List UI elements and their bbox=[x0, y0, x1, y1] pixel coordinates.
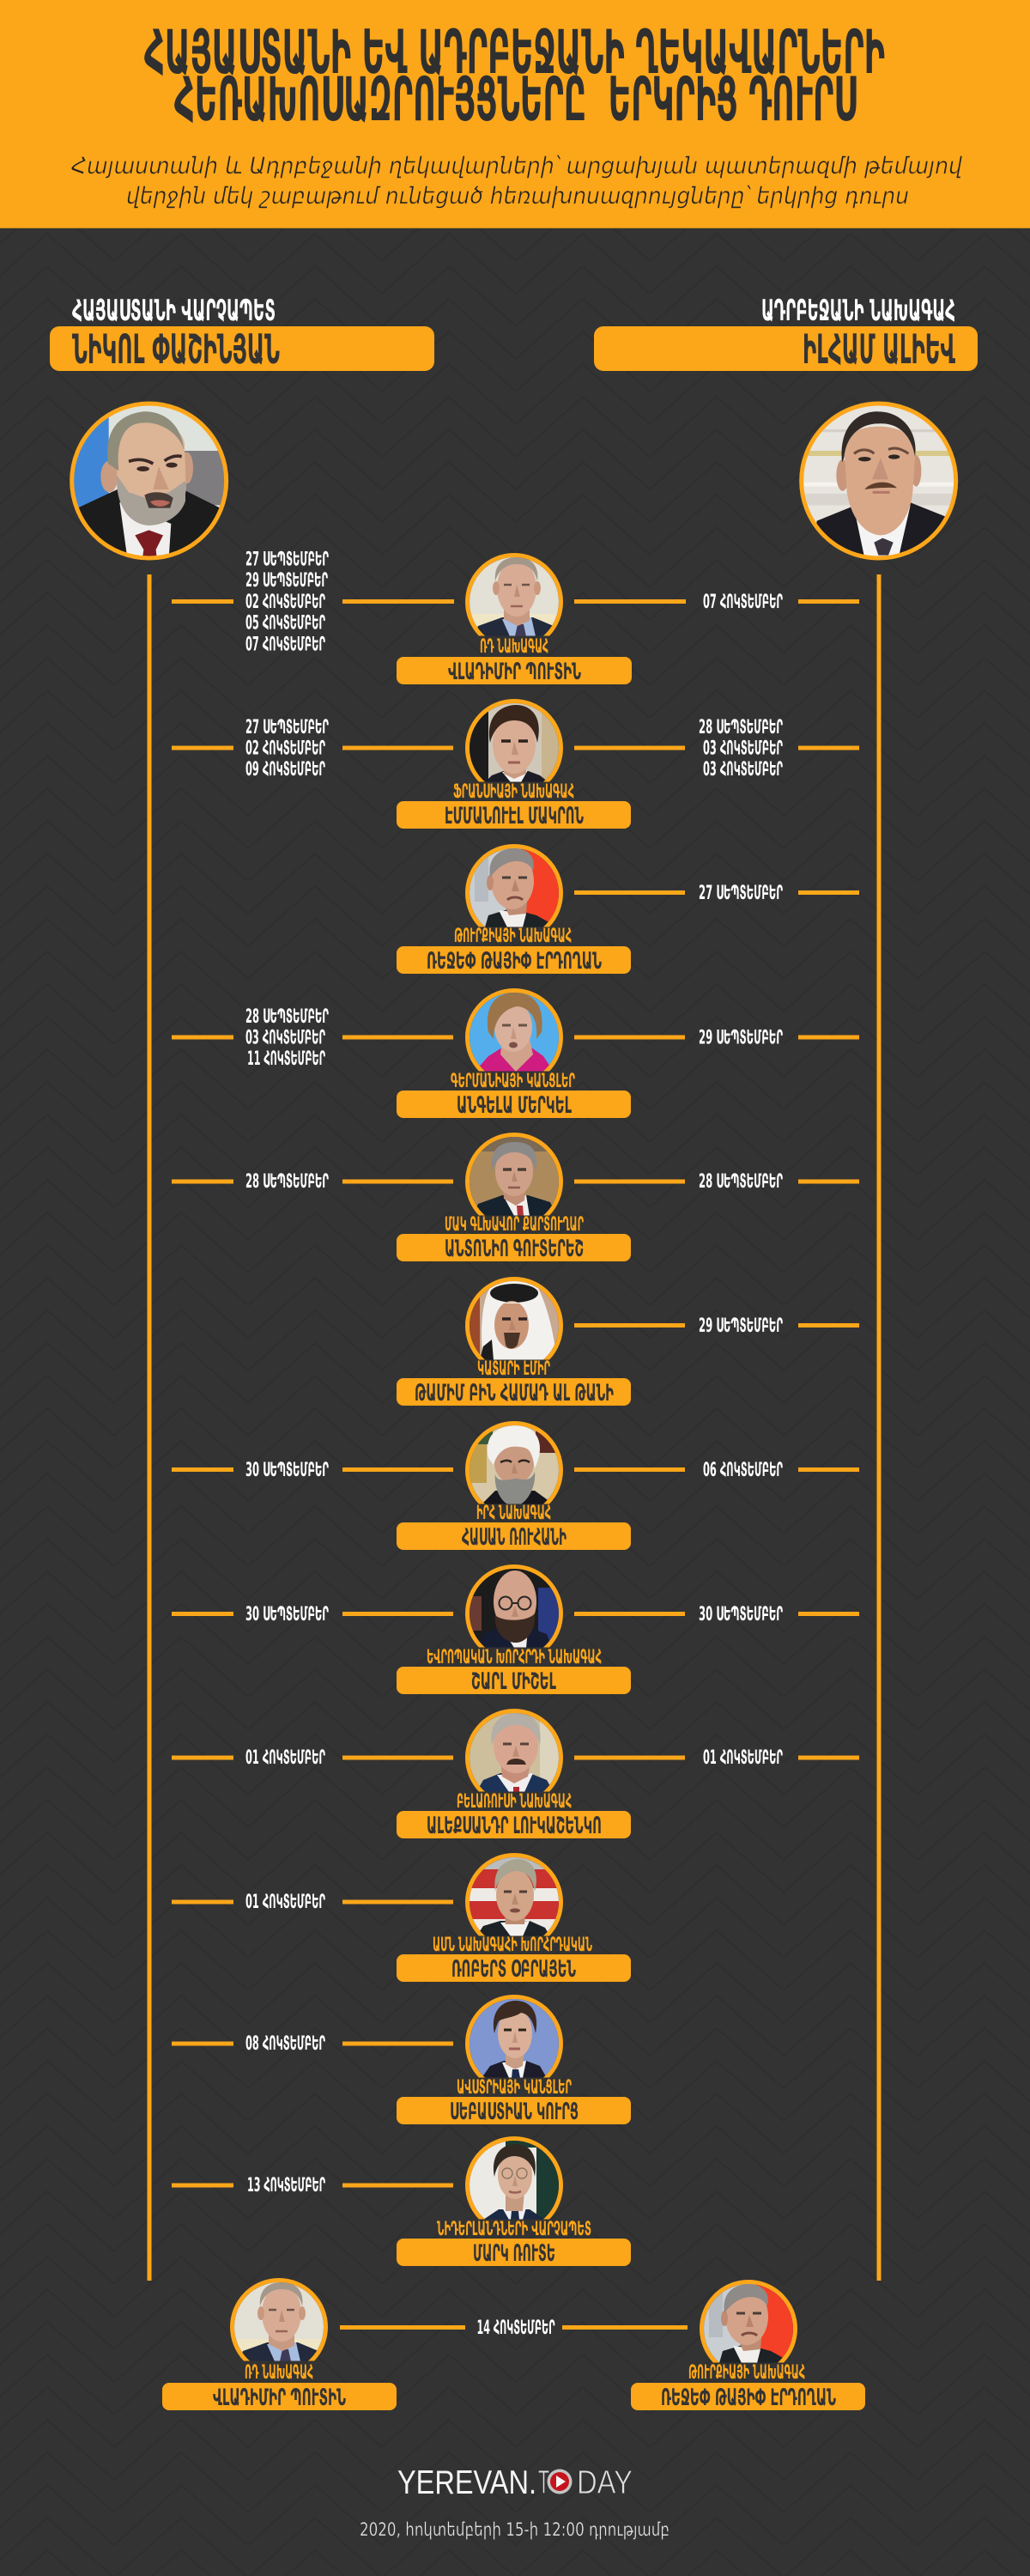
name pill: ՇԱՐԼ ՄԻՇԵԼ bbox=[471, 1668, 556, 1695]
row: Al Thani bbox=[397, 1274, 859, 1406]
portrait: Rutte bbox=[465, 2136, 563, 2219]
footer date note: 2020, հոկտեմբերի 15-ի 12:00 դրությամբ bbox=[360, 2519, 670, 2540]
name pill: Putin: ՎԼԱԴԻՄԻՐ ՊՈՒՏԻՆ bbox=[213, 2385, 346, 2411]
connectors bbox=[172, 2042, 453, 2045]
dates Armenia side bbox=[245, 550, 329, 655]
dates Azerbaijan side: 06 ՀՈԿՏԵՄԲԵՐ bbox=[703, 1460, 783, 1481]
subtitle bbox=[71, 153, 963, 210]
dates Armenia side bbox=[245, 717, 329, 781]
dates Armenia side: 11 ՀՈԿՏԵՄԲԵՐ bbox=[247, 1048, 325, 1070]
row: Erdogan bbox=[397, 841, 859, 975]
row: Macron bbox=[172, 696, 859, 829]
connectors bbox=[172, 745, 859, 750]
dates Armenia side: 09 ՀՈԿՏԵՄԲԵՐ bbox=[245, 759, 325, 781]
dates Armenia side: 03 ՀՈԿՏԵՄԲԵՐ bbox=[245, 1027, 325, 1049]
portrait: Putin bbox=[230, 2278, 328, 2361]
caption: ԱՎՍՏՐԻԱՅԻ ԿԱՆՑԼԵՐ bbox=[457, 2077, 572, 2099]
name pill: Erdogan bbox=[631, 2383, 865, 2411]
portrait: Pashinyan bbox=[70, 402, 228, 560]
logo: Yerevan.Today: DAY bbox=[577, 2464, 633, 2501]
name pill bbox=[397, 2239, 631, 2267]
name pill bbox=[397, 1811, 631, 1839]
dates Azerbaijan side bbox=[699, 717, 783, 781]
connectors bbox=[340, 2325, 688, 2330]
caption: ԳԵՐՄԱՆԻԱՅԻ ԿԱՆՑԼԵՐ bbox=[451, 1071, 575, 1092]
dates Armenia side: 08 ՀՈԿՏԵՄԲԵՐ bbox=[245, 2033, 325, 2055]
name pill bbox=[397, 946, 631, 975]
timeline line: Armenia bbox=[148, 574, 151, 2281]
dates Armenia side: 02 ՀՈԿՏԵՄԲԵՐ bbox=[245, 592, 325, 613]
portrait: Guterres bbox=[465, 1133, 563, 1216]
portrait: Lukashenko bbox=[465, 1709, 563, 1791]
name pill: ՍԵԲԱՍՏԻԱՆ ԿՈՒՐՑ bbox=[450, 2099, 579, 2125]
portrait: Merkel bbox=[465, 988, 563, 1072]
row: Rutte bbox=[172, 2134, 631, 2267]
dates Armenia side: 27 ՍԵՊՏԵՄԲԵՐ bbox=[245, 550, 329, 570]
name pill bbox=[397, 2097, 631, 2125]
name pill: ՎԼԱԴԻՄԻՐ ՊՈՒՏԻՆ bbox=[448, 659, 581, 685]
dates Armenia side: 27 ՍԵՊՏԵՄԲԵՐ bbox=[245, 717, 329, 738]
caption: ԲԵԼԱՌՈՒՍԻ ՆԱԽԱԳԱՀ bbox=[457, 1791, 572, 1813]
name pill: ԷՄՄԱՆՈՒԷԼ ՄԱԿՐՈՆ bbox=[445, 803, 584, 829]
dates Armenia side: 28 ՍԵՊՏԵՄԲԵՐ bbox=[245, 1171, 329, 1193]
caption: ՖՐԱՆՍԻԱՅԻ ՆԱԽԱԳԱՀ bbox=[453, 781, 574, 803]
dates Azerbaijan side: 29 ՍԵՊՏԵՄԲԵՐ bbox=[699, 1315, 783, 1337]
dates Azerbaijan side: 28 ՍԵՊՏԵՄԲԵՐ bbox=[699, 1171, 783, 1193]
portrait: Erdogan bbox=[700, 2280, 797, 2363]
row: O'Brien bbox=[172, 1850, 631, 1983]
connectors bbox=[172, 1612, 859, 1616]
row: Rouhani bbox=[172, 1419, 859, 1551]
name pill bbox=[397, 1378, 631, 1406]
row: Kurz bbox=[172, 1992, 631, 2125]
subtitle: Հայաստանի և Ադրբեջանի ղեկավարների՝ արցախյան պատերազմի թեմայով bbox=[71, 153, 963, 179]
row: Michel bbox=[172, 1562, 859, 1695]
dates Armenia side: 29 ՍԵՊՏԵՄԲԵՐ bbox=[245, 570, 328, 592]
connectors bbox=[172, 1899, 453, 1905]
connectors bbox=[172, 1180, 859, 1183]
name pill bbox=[397, 1667, 631, 1695]
dates Azerbaijan side: 03 ՀՈԿՏԵՄԲԵՐ bbox=[703, 759, 783, 781]
portrait: Macron bbox=[465, 699, 563, 781]
leader: Azerbaijan president bbox=[594, 294, 978, 573]
row: Lukashenko bbox=[172, 1706, 859, 1839]
connectors bbox=[172, 1467, 859, 1472]
caption: ԻՐՀ ՆԱԽԱԳԱՀ bbox=[476, 1503, 551, 1524]
icon: play button bbox=[548, 2470, 572, 2494]
connectors bbox=[172, 599, 859, 604]
dates Armenia side: 05 ՀՈԿՏԵՄԲԵՐ bbox=[245, 613, 325, 635]
name pill: Erdogan: ՌԵՋԵՓ ԹԱՅԻՓ ԷՐԴՈՂԱՆ bbox=[661, 2385, 836, 2411]
leader: Armenia prime minister bbox=[50, 294, 434, 573]
row: Merkel bbox=[172, 986, 859, 1119]
caption: Erdogan: ԹՈՒՐՔԻԱՅԻ ՆԱԽԱԳԱՀ bbox=[688, 2362, 805, 2384]
row: Putin: ՌԴ ՆԱԽԱԳԱՀ bbox=[480, 636, 548, 658]
portrait: Aliyev bbox=[799, 402, 958, 560]
name pill: ԱՆԳԵԼԱ ՄԵՐԿԵԼ bbox=[457, 1092, 572, 1119]
dates Armenia side: 28 ՍԵՊՏԵՄԲԵՐ bbox=[245, 1006, 329, 1028]
portrait: Al Thani bbox=[465, 1277, 563, 1360]
name pill bbox=[397, 1522, 631, 1551]
final row: Putin and Erdogan call bbox=[162, 2275, 865, 2411]
connectors bbox=[172, 1755, 859, 1760]
dates Azerbaijan side: 28 ՍԵՊՏԵՄԲԵՐ bbox=[699, 717, 783, 738]
role label left: ՀԱՅԱՍՏԱՆԻ ՎԱՐՉԱՊԵՏ bbox=[72, 294, 276, 328]
subtitle: վերջին մեկ շաբաթում ունեցած հեռախոսազրույցները՝ երկրից դուրս bbox=[126, 183, 909, 210]
name pill: ԱԼԵՔՍԱՆԴՐ ԼՈՒԿԱՇԵՆԿՈ bbox=[427, 1813, 602, 1839]
connectors bbox=[172, 1036, 859, 1039]
name pill: ՀԱՍԱՆ ՌՈՒՀԱՆԻ bbox=[462, 1524, 566, 1551]
dates Armenia side: 13 ՀՈԿՏԵՄԲԵՐ bbox=[247, 2175, 325, 2196]
name pill: ՌԵՋԵՓ ԹԱՅԻՓ ԷՐԴՈՂԱՆ bbox=[427, 948, 602, 975]
name pill bbox=[397, 657, 632, 685]
name pill: Putin bbox=[162, 2383, 397, 2411]
connectors bbox=[172, 2183, 453, 2188]
date: 14 ՀՈԿՏԵՄԲԵՐ bbox=[477, 2318, 555, 2339]
caption: ՄԱԿ ԳԼԽԱՎՈՐ ՔԱՐՏՈՒՂԱՐ bbox=[445, 1214, 584, 1236]
row: Putin bbox=[172, 550, 859, 685]
dates Armenia side: 07 ՀՈԿՏԵՄԲԵՐ bbox=[245, 634, 325, 655]
caption: ԿԱՏԱՐԻ ԷՄԻՐ bbox=[477, 1358, 550, 1380]
dates Azerbaijan side: 30 ՍԵՊՏԵՄԲԵՐ bbox=[699, 1604, 783, 1625]
name pill bbox=[397, 1954, 631, 1983]
dates Azerbaijan side: 03 ՀՈԿՏԵՄԲԵՐ bbox=[703, 738, 783, 759]
name pill: ԹԱՄԻՄ ԲԻՆ ՀԱՄԱԴ ԱԼ ԹԱՆԻ bbox=[415, 1380, 614, 1406]
portrait: Erdogan bbox=[465, 844, 563, 927]
timeline line: Azerbaijan bbox=[877, 574, 881, 2281]
logo: Yerevan.Today: YEREVAN. bbox=[397, 2464, 536, 2501]
dates Azerbaijan side: 07 ՀՈԿՏԵՄԲԵՐ bbox=[703, 592, 783, 613]
row: Guterres bbox=[172, 1130, 859, 1262]
name pill left: ՆԻԿՈԼ ՓԱՇԻՆՅԱՆ bbox=[72, 326, 280, 374]
name pill bbox=[397, 1091, 631, 1119]
dates Azerbaijan side: 27 ՍԵՊՏԵՄԲԵՐ bbox=[699, 883, 783, 904]
portrait: Kurz bbox=[465, 1995, 563, 2078]
dates Armenia side: 01 ՀՈԿՏԵՄԲԵՐ bbox=[245, 1747, 325, 1769]
header band bbox=[0, 0, 1030, 228]
name pill: ՄԱՐԿ ՌՈՒՏԵ bbox=[473, 2240, 555, 2267]
name pill bbox=[397, 1234, 631, 1262]
dates Armenia side: 01 ՀՈԿՏԵՄԲԵՐ bbox=[245, 1892, 325, 1913]
dates Armenia side: 30 ՍԵՊՏԵՄԲԵՐ bbox=[245, 1460, 329, 1481]
portrait: Putin bbox=[465, 553, 563, 635]
logo: Yerevan.Today: T bbox=[538, 2464, 549, 2501]
portrait: Michel bbox=[465, 1564, 563, 1647]
dates Azerbaijan side: 01 ՀՈԿՏԵՄԲԵՐ bbox=[703, 1747, 783, 1769]
portrait: O'Brien bbox=[465, 1853, 563, 1935]
name pill right bbox=[594, 326, 978, 374]
portrait: Rouhani bbox=[465, 1421, 563, 1504]
final row: Putin and Erdogan call: ՌԴ ՆԱԽԱԳԱՀ bbox=[245, 2362, 313, 2384]
title bbox=[144, 17, 885, 135]
dates Azerbaijan side: 29 ՍԵՊՏԵՄԲԵՐ bbox=[699, 1027, 783, 1049]
name pill bbox=[397, 801, 631, 829]
caption: ԹՈՒՐՔԻԱՅԻ ՆԱԽԱԳԱՀ bbox=[454, 926, 572, 947]
caption: ՆԻԴԵՐԼԱՆԴՆԵՐԻ ՎԱՐՉԱՊԵՏ bbox=[437, 2219, 591, 2240]
dates Armenia side: 30 ՍԵՊՏԵՄԲԵՐ bbox=[245, 1604, 329, 1625]
dates Armenia side bbox=[245, 1006, 329, 1070]
name pill: ՌՈԲԵՐՏ ՕԲՐԱՅԵՆ bbox=[451, 1956, 576, 1983]
caption: ԵՎՐՈՊԱԿԱՆ ԽՈՐՀՐԴԻ ՆԱԽԱԳԱՀ bbox=[427, 1647, 602, 1668]
connectors bbox=[574, 1323, 859, 1327]
dates Armenia side: 02 ՀՈԿՏԵՄԲԵՐ bbox=[245, 738, 325, 759]
caption: ԱՄՆ ՆԱԽԱԳԱՀԻ ԽՈՐՀՐԴԱԿԱՆ bbox=[433, 1935, 592, 1956]
name pill: ԱՆՏՈՆԻՈ ԳՈՒՏԵՐԵՇ bbox=[445, 1236, 584, 1262]
connectors bbox=[574, 890, 859, 895]
